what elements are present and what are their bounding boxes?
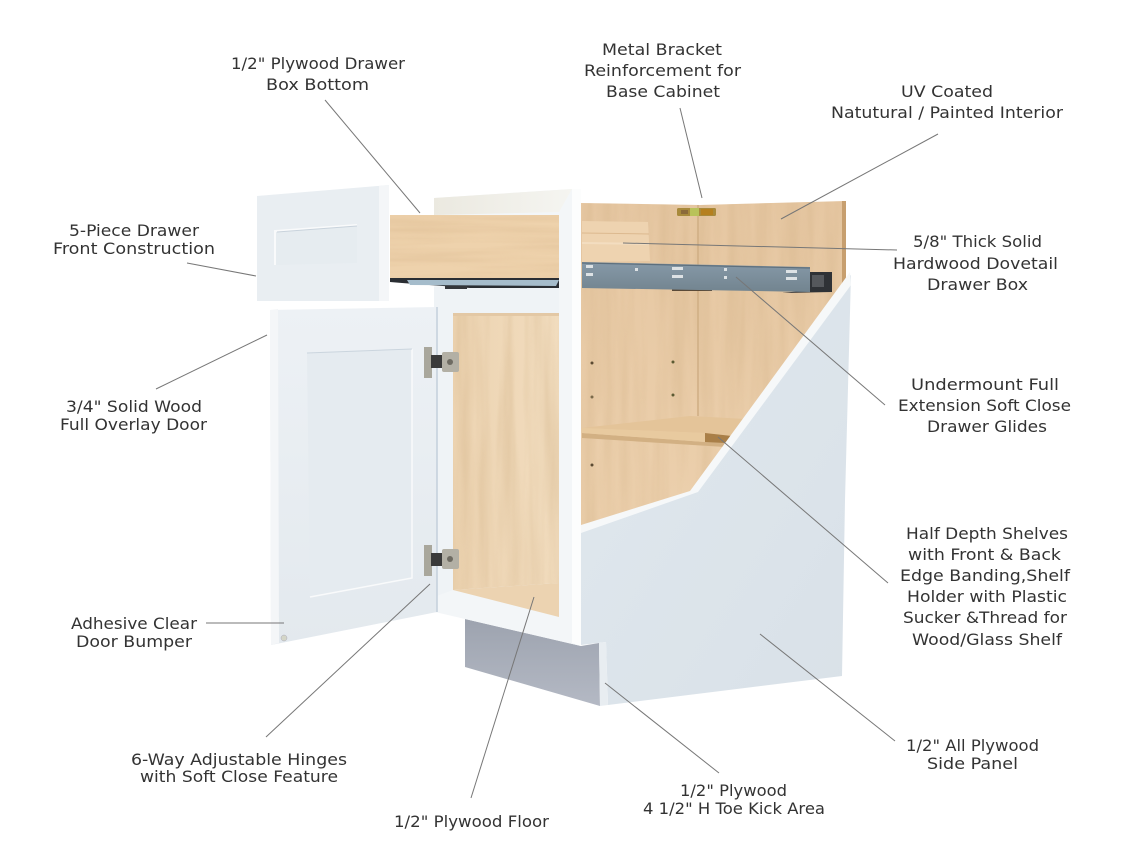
- side panel: [581, 272, 851, 705]
- callout: dovetail drawer box: Hardwood Dovetail: [893, 254, 1058, 273]
- callout: toe kick: 4 1/2" H Toe Kick Area: [643, 799, 825, 818]
- callout: metal bracket: Metal Bracket: [602, 40, 722, 59]
- lower hinge: [424, 545, 459, 576]
- callout: hinges: with Soft Close Feature: [140, 767, 338, 786]
- shelf: [582, 416, 746, 447]
- callout: drawer front construction: 5-Piece Drawer: [69, 221, 199, 240]
- callout: drawer front construction: [53, 221, 256, 276]
- callout: UV coated interior: [781, 82, 1063, 219]
- metal bracket: [677, 208, 716, 216]
- callout: side panel: [760, 634, 1039, 773]
- callout: half depth shelves: Sucker &Thread for: [903, 608, 1067, 627]
- callout: hinges: [131, 584, 430, 786]
- callout: half depth shelves: Holder with Plastic: [907, 587, 1067, 606]
- callout: half depth shelves: Edge Banding,Shelf: [900, 566, 1070, 585]
- callout: UV coated interior: Natutural / Painted Interior: [831, 103, 1063, 122]
- callout: dovetail drawer box: 5/8" Thick Solid: [913, 232, 1042, 251]
- drawer side in back: [582, 221, 650, 262]
- callout: plywood floor: 1/2" Plywood Floor: [394, 812, 549, 831]
- drawer slide under box: [390, 278, 559, 289]
- back wall: [581, 201, 846, 535]
- callout: door bumper: [71, 614, 284, 651]
- drawer box: [390, 215, 559, 278]
- callout: half depth shelves: Half Depth Shelves: [906, 524, 1068, 543]
- drawer glide: [582, 262, 832, 293]
- callout: drawer front construction: Front Construction: [53, 239, 215, 258]
- callout: hinges: 6-Way Adjustable Hinges: [131, 750, 347, 769]
- callout: UV coated interior: UV Coated: [901, 82, 993, 101]
- callout: drawer glides: Undermount Full: [911, 375, 1059, 394]
- callout: door bumper: Adhesive Clear: [71, 614, 197, 633]
- callout: drawer box bottom: 1/2" Plywood Drawer: [231, 54, 405, 73]
- callout: metal bracket: Reinforcement for: [584, 61, 741, 80]
- cabinet illustration: [257, 185, 851, 706]
- face frame: [434, 189, 581, 646]
- callout: half depth shelves: Wood/Glass Shelf: [912, 630, 1062, 649]
- callout: metal bracket: [584, 40, 741, 198]
- callout: toe kick: [605, 683, 825, 818]
- callout: dovetail drawer box: Drawer Box: [927, 275, 1028, 294]
- callout: overlay door: [60, 335, 267, 434]
- callout: drawer glides: [736, 277, 1071, 436]
- drawer front: [257, 185, 389, 301]
- callout: half depth shelves: [718, 437, 1070, 649]
- door: [270, 307, 437, 645]
- callout: side panel: 1/2" All Plywood: [906, 736, 1039, 755]
- callout: plywood floor: [394, 597, 549, 831]
- callout: overlay door: Full Overlay Door: [60, 415, 207, 434]
- callout: dovetail drawer box: [623, 232, 1058, 294]
- callout: drawer box bottom: [231, 54, 420, 213]
- cabinet interior wall: [453, 313, 559, 590]
- callout: side panel: Side Panel: [927, 754, 1018, 773]
- callout: half depth shelves: with Front & Back: [908, 545, 1062, 564]
- callout: drawer glides: Extension Soft Close: [898, 396, 1071, 415]
- callout: drawer glides: Drawer Glides: [927, 417, 1047, 436]
- callout: door bumper: Door Bumper: [76, 632, 192, 651]
- upper hinge: [424, 347, 459, 378]
- toe kick: [465, 619, 608, 706]
- callout: drawer box bottom: Box Bottom: [266, 75, 369, 94]
- callout: overlay door: 3/4" Solid Wood: [66, 397, 202, 416]
- callout: toe kick: 1/2" Plywood: [680, 781, 787, 800]
- plywood floor: [453, 583, 559, 617]
- callout: metal bracket: Base Cabinet: [606, 82, 720, 101]
